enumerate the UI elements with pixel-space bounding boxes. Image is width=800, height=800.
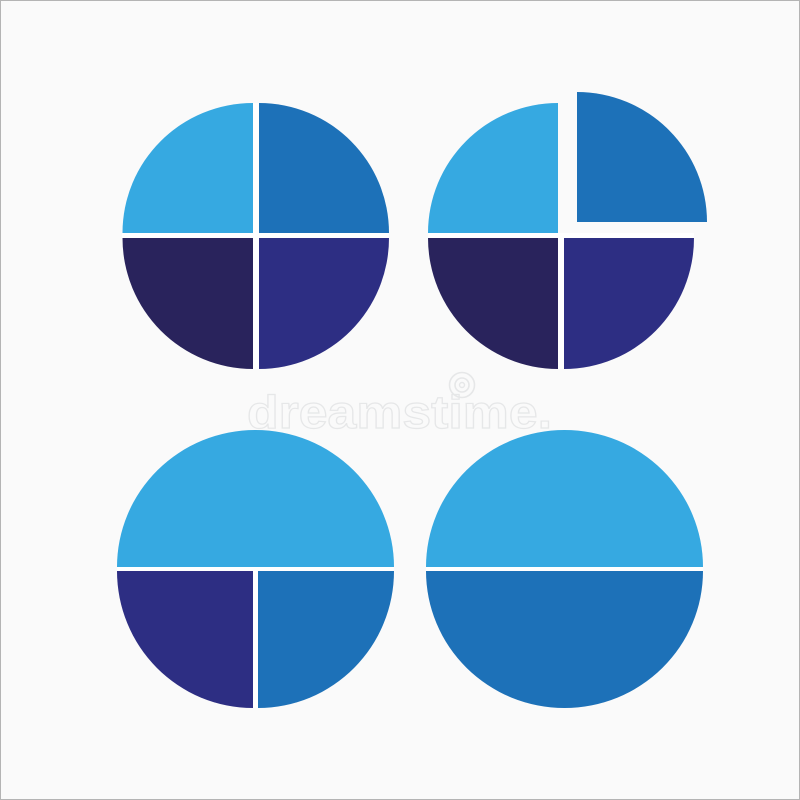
- watermark: dreamstime.: [247, 386, 552, 438]
- panel: circle divided into two halves: [426, 430, 703, 708]
- panel: circle with top half and two bottom quarters: [117, 430, 394, 708]
- panel: circle divided into four quarters: [122, 103, 389, 369]
- panel: circle with top-right quarter pulled out: [428, 92, 707, 369]
